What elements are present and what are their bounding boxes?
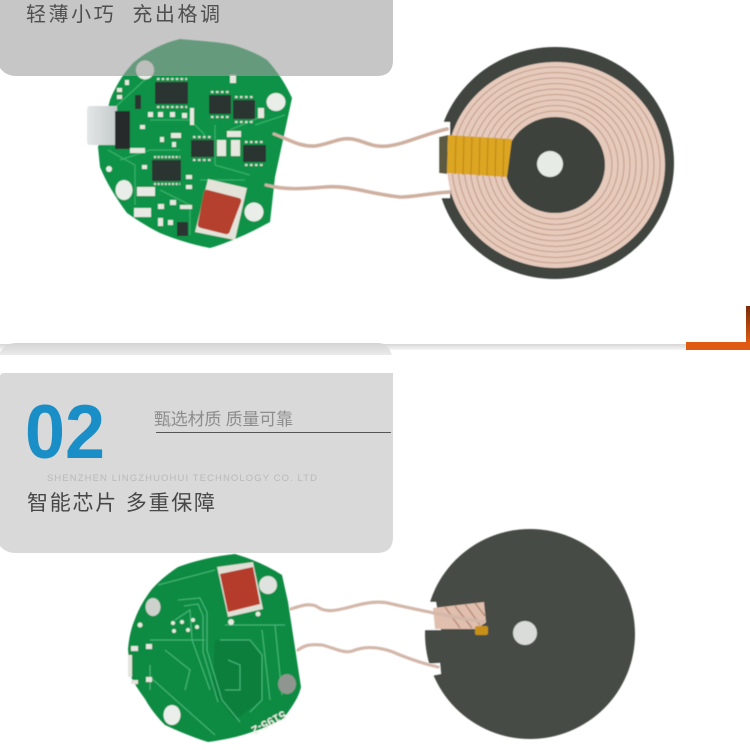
integrated circuits [135, 82, 266, 236]
red capacitor [195, 179, 247, 240]
top caption panel [0, 0, 393, 76]
horizontal stroke [686, 342, 750, 350]
bottom coil wires [291, 602, 484, 667]
yellow tape glimpse [475, 626, 488, 635]
disc [425, 529, 635, 739]
ferrite disc [436, 47, 674, 279]
bottom divider line [0, 344, 686, 350]
board traces [108, 75, 285, 235]
section heading: 智能芯片 多重保障 [27, 492, 215, 515]
company name: SHENZHEN LINGZHUOHUI TECHNOLOGY CO. LTD [47, 473, 317, 484]
top coil assembly [430, 47, 674, 279]
section subtitle: 甄选材质 质量可靠 [154, 410, 293, 429]
bottom caption panel [0, 373, 393, 553]
small components [117, 75, 264, 226]
mounting holes [146, 576, 296, 725]
side pads [128, 644, 152, 684]
silver pads [137, 187, 155, 196]
second silver pad [134, 208, 151, 217]
top product: circuit board [87, 39, 292, 248]
yellow tape [439, 135, 512, 177]
bottom ferrite disc with notch [420, 529, 635, 739]
centre hole [537, 151, 563, 177]
coil window [433, 602, 486, 629]
vertical stroke [746, 306, 750, 343]
ferrite core [505, 117, 605, 213]
via dots [138, 612, 260, 633]
board outline [128, 554, 301, 742]
bottom product: circuit board [128, 554, 301, 742]
copper coil [447, 62, 665, 268]
notch [420, 602, 441, 630]
coil window stripes [445, 603, 485, 628]
USB-C connector [87, 106, 130, 149]
clipped panel remnant [0, 343, 392, 355]
board traces [150, 570, 285, 735]
chip pins [154, 79, 265, 184]
mounting holes [106, 60, 286, 222]
top coil wires [266, 129, 450, 197]
subtitle underline [156, 432, 391, 433]
red capacitor [217, 562, 263, 617]
board marking: 5195-2 [249, 708, 289, 738]
section number: 02 [25, 390, 105, 475]
lower wire slot [422, 663, 441, 677]
top caption text: 轻薄小巧 充出格调 [26, 3, 220, 26]
board outline [98, 39, 292, 248]
disc notch [430, 122, 450, 198]
centre hole [513, 621, 537, 645]
dark copper zones [212, 640, 262, 720]
orange corner mark [686, 306, 750, 350]
